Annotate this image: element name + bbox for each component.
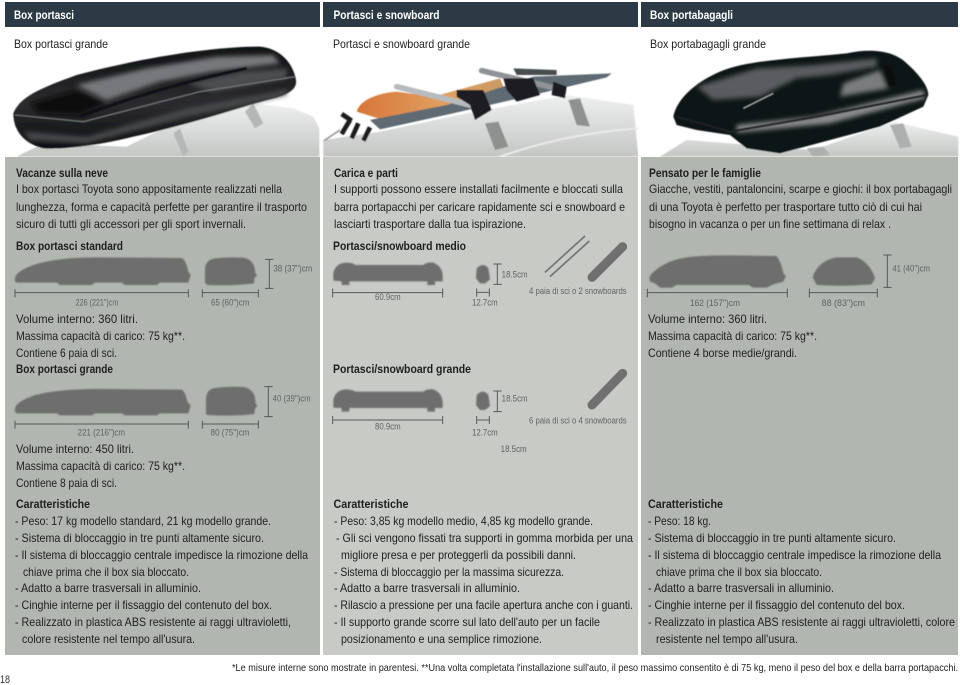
features list: - Peso: 17 kg modello standard, 21 kg modello grande. bbox=[15, 514, 271, 528]
intro text bbox=[649, 166, 952, 231]
intro text: sicuro di tutti gli accessori per gli sport invernali. bbox=[16, 217, 246, 231]
diagram: large rack dimensions: 80.9cm bbox=[375, 421, 401, 431]
features list: posizionamento e una semplice rimozione. bbox=[341, 632, 542, 646]
subheading: Box portasci grande: Box portasci grande bbox=[14, 37, 108, 51]
photo: black luggage box on car bbox=[660, 51, 958, 157]
diagram: standard box dimensions: 38 (37")cm bbox=[273, 264, 312, 274]
features list: - Adatto a barre trasversali in alluminio. bbox=[648, 581, 834, 595]
diagram: large rack dimensions: 18.5cm bbox=[502, 393, 528, 403]
intro text: di una Toyota è perfetto per trasportare tutto ciò di cui hai bbox=[649, 200, 922, 214]
features list: - Rilascio a pressione per una facile apertura anche con i guanti. bbox=[334, 598, 633, 612]
intro text bbox=[16, 166, 307, 231]
features list: colore resistente nel tempo all'usura. bbox=[22, 632, 195, 646]
features list: - Sistema di bloccaggio per la massima sicurezza. bbox=[334, 565, 564, 579]
photo: ski and snowboard rack on car bbox=[323, 68, 638, 157]
specs: large box: Contiene 8 paia di sci. bbox=[16, 476, 117, 490]
features list: - Il sistema di bloccaggio centrale impedisce la rimozione della bbox=[15, 548, 308, 562]
specs: standard box: Massima capacità di carico: 75 kg**. bbox=[16, 329, 185, 343]
features list: - Peso: 3,85 kg modello medio, 4,85 kg modello grande. bbox=[334, 514, 593, 528]
diagram: luggage box dimensions: 162 (157")cm bbox=[690, 298, 740, 308]
heading: Portasci/snowboard medio: Portasci/snowboard medio bbox=[333, 239, 466, 253]
diagram: luggage box dimensions: 88 (83")cm bbox=[822, 298, 865, 308]
specs: standard box: Contiene 6 paia di sci. bbox=[16, 346, 117, 360]
header bar: Box portasci: Box portasci bbox=[14, 8, 74, 22]
intro text: lasciarti trasportare dalla tua ispirazione. bbox=[334, 217, 526, 231]
column 3: box portabagagli bbox=[641, 2, 958, 655]
features list: - Adatto a barre trasversali in alluminio. bbox=[334, 581, 520, 595]
icon: snowboard bbox=[592, 373, 623, 405]
specs: standard box bbox=[16, 312, 185, 360]
heading: Box portasci standard: Box portasci standard bbox=[16, 239, 123, 253]
features list: - Realizzato in plastica ABS resistente ai raggi ultravioletti, bbox=[15, 615, 291, 629]
intro text: Vacanze sulla neve bbox=[16, 166, 108, 180]
diagram: large rack dimensions bbox=[333, 373, 627, 454]
intro text: barra portapacchi per caricare rapidamente sci e snowboard e bbox=[334, 200, 625, 214]
column 2: portasci e snowboard bbox=[323, 2, 638, 655]
photo: black roof box on car bbox=[13, 47, 319, 157]
features list: resistente nel tempo all'usura. bbox=[656, 632, 798, 646]
intro text: bisogno in vacanza o per un fine settimana di relax . bbox=[649, 217, 891, 231]
diagram: large rack dimensions: 6 paia di sci o 4 snowboards bbox=[529, 416, 627, 426]
header bar: Box portabagagli bbox=[641, 2, 958, 27]
specs: luggage box bbox=[648, 312, 817, 360]
header bar: Box portabagagli: Box portabagagli bbox=[650, 8, 733, 22]
specs: luggage box: Volume interno: 360 litri. bbox=[648, 312, 767, 326]
intro text: Carica e parti bbox=[334, 166, 398, 180]
heading: Box portasci grande: Box portasci grande bbox=[16, 362, 113, 376]
intro text bbox=[334, 166, 625, 231]
diagram: large box dimensions bbox=[15, 387, 311, 437]
diagram: standard box dimensions: 65 (60")cm bbox=[211, 298, 249, 308]
features list: - Peso: 18 kg. bbox=[648, 514, 711, 528]
specs: large box bbox=[16, 442, 185, 490]
intro text: lunghezza, forma e capacità perfette per garantire il trasporto bbox=[16, 200, 307, 214]
diagram: large box dimensions: 80 (75")cm bbox=[211, 427, 249, 437]
features list: - Sistema di bloccaggio in tre punti altamente sicuro. bbox=[648, 531, 896, 545]
diagram: medium rack dimensions bbox=[333, 236, 627, 307]
features list: Caratteristiche bbox=[16, 497, 90, 511]
features list: migliore presa e per proteggerli da possibili danni. bbox=[341, 548, 576, 562]
diagram: large rack dimensions: 18.5cm bbox=[501, 444, 527, 454]
features list: - Cinghie interne per il fissaggio del contenuto del box. bbox=[648, 598, 905, 612]
header bar: Portasci e snowboard: Portasci e snowboard bbox=[334, 8, 440, 22]
features list: - Cinghie interne per il fissaggio del contenuto del box. bbox=[15, 598, 272, 612]
features list bbox=[334, 497, 633, 646]
diagram: medium rack dimensions: 12.7cm bbox=[472, 297, 498, 307]
icon: snowboard bbox=[592, 247, 623, 277]
diagram: medium rack dimensions: 4 paia di sci o 2 snowboards bbox=[529, 286, 627, 296]
features list: - Adatto a barre trasversali in alluminio. bbox=[15, 581, 201, 595]
specs: luggage box: Contiene 4 borse medie/grandi. bbox=[648, 346, 797, 360]
subheading: Box portabagagli grande: Box portabagagli grande bbox=[650, 37, 766, 51]
diagram: large box dimensions: 40 (39")cm bbox=[273, 393, 311, 403]
diagram: standard box dimensions: 226 (221")cm bbox=[76, 298, 118, 308]
features list: chiave prima che il box sia bloccato. bbox=[23, 565, 189, 579]
panel: box portasci text bbox=[5, 157, 320, 655]
icon: skis bbox=[545, 236, 589, 277]
features list: chiave prima che il box sia bloccato. bbox=[656, 565, 822, 579]
features list: Caratteristiche bbox=[334, 497, 409, 511]
specs: large box: Volume interno: 450 litri. bbox=[16, 442, 134, 456]
specs: standard box: Volume interno: 360 litri. bbox=[16, 312, 138, 326]
specs: luggage box: Massima capacità di carico: 75 kg**. bbox=[648, 329, 817, 343]
diagram: luggage box dimensions bbox=[647, 255, 930, 308]
diagram: large box dimensions: 221 (216")cm bbox=[78, 427, 125, 437]
intro text: I supporti possono essere installati facilmente e bloccati sulla bbox=[334, 182, 623, 196]
diagram: medium rack dimensions: 60.9cm bbox=[375, 292, 401, 302]
header bar: Portasci e snowboard bbox=[323, 2, 638, 27]
features list bbox=[15, 497, 308, 646]
panel: portabagagli text bbox=[641, 157, 958, 655]
features list: Caratteristiche bbox=[648, 497, 723, 511]
diagram: standard box dimensions bbox=[15, 257, 312, 308]
intro text: Pensato per le famiglie bbox=[649, 166, 761, 180]
heading: Portasci/snowboard grande: Portasci/snowboard grande bbox=[333, 362, 471, 376]
intro text: I box portasci Toyota sono appositamente realizzati nella bbox=[16, 182, 282, 196]
subheading: Portasci e snowboard grande: Portasci e snowboard grande bbox=[333, 37, 470, 51]
diagram: luggage box dimensions: 41 (40")cm bbox=[892, 264, 930, 274]
header bar: Box portasci bbox=[5, 2, 320, 27]
panel: portasci text bbox=[323, 157, 638, 655]
specs: large box: Massima capacità di carico: 75 kg**. bbox=[16, 459, 185, 473]
features list: - Il supporto grande scorre sul lato dell'auto per un facile bbox=[334, 615, 600, 629]
column 1: box portasci bbox=[5, 2, 320, 655]
features list bbox=[648, 497, 955, 646]
features list: - Gli sci vengono fissati tra supporti in gomma morbida per una bbox=[336, 531, 633, 545]
diagram: large rack dimensions: 12.7cm bbox=[472, 427, 498, 437]
diagram: medium rack dimensions: 18.5cm bbox=[502, 270, 528, 280]
features list: - Sistema di bloccaggio in tre punti altamente sicuro. bbox=[15, 531, 264, 545]
